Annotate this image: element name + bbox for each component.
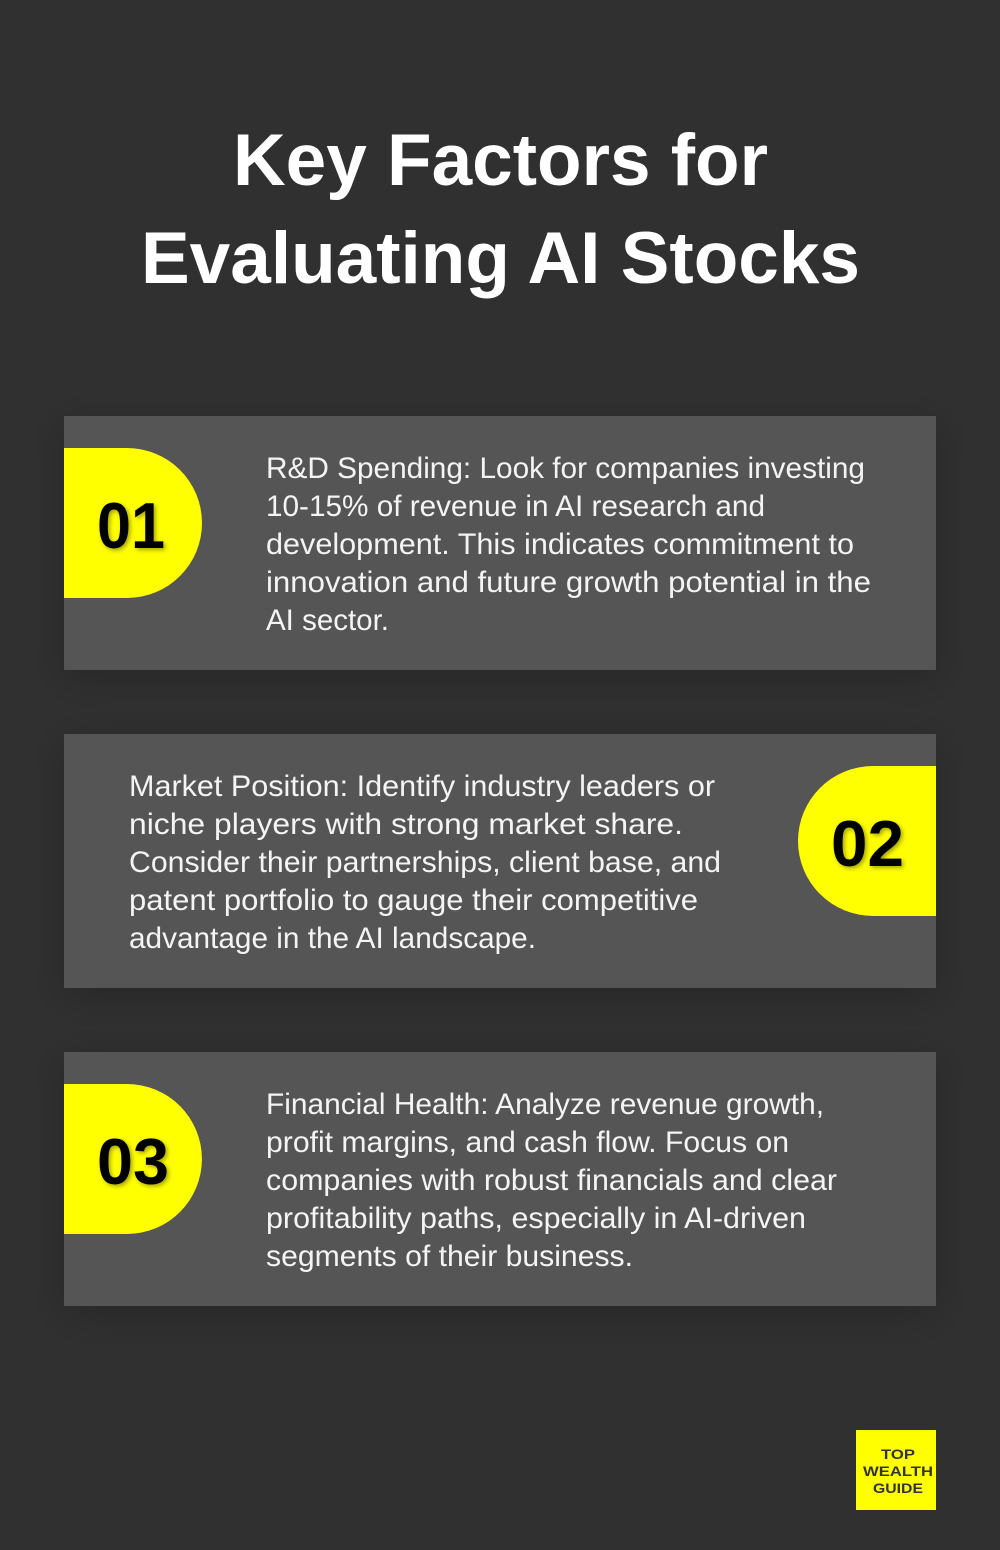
text block: financial health: companies with robust financials and clear	[266, 1164, 837, 1197]
logo: Top Wealth Guide: WEALTH	[863, 1464, 933, 1479]
title: Evaluating AI Stocks	[141, 218, 860, 299]
text block: financial health: segments of their business.	[266, 1240, 633, 1273]
logo: Top Wealth Guide: GUIDE	[873, 1481, 923, 1496]
text block: financial health: profitability paths, especially in AI-driven	[266, 1202, 806, 1235]
number badge 03: 03	[97, 1125, 169, 1198]
panel: R&D spending	[64, 416, 936, 670]
title: Key Factors for	[233, 120, 768, 201]
number badge 01: 01	[97, 489, 165, 562]
text block: R&D spending	[266, 452, 871, 637]
text block: financial health: profit margins, and cash flow. Focus on	[266, 1126, 789, 1159]
number badge 02: 02	[831, 807, 904, 880]
number badge 02	[798, 766, 936, 916]
text block: financial health	[266, 1088, 837, 1273]
text block: market position: patent portfolio to gauge their competitive	[129, 884, 698, 917]
text block: market position: Consider their partnerships, client base, and	[129, 846, 721, 879]
text block: market position: Market Position: Identify industry leaders or	[129, 770, 715, 803]
title	[141, 120, 860, 299]
text block: R&D spending: innovation and future growth potential in the	[266, 566, 871, 599]
number badge 03	[64, 1084, 202, 1234]
logo: Top Wealth Guide	[856, 1430, 936, 1510]
text block: market position	[129, 770, 721, 955]
text block: R&D spending: R&D Spending: Look for companies investing	[266, 452, 865, 485]
text block: financial health: Financial Health: Analyze revenue growth,	[266, 1088, 824, 1121]
text block: R&D spending: AI sector.	[266, 604, 389, 637]
logo: Top Wealth Guide: TOP	[881, 1447, 915, 1462]
text block: R&D spending: development. This indicates commitment to	[266, 528, 854, 561]
text block: R&D spending: 10-15% of revenue in AI research and	[266, 490, 765, 523]
text block: market position: niche players with strong market share.	[129, 808, 683, 841]
panel: financial health	[64, 1052, 936, 1306]
panel: market position	[64, 734, 936, 988]
text block: market position: advantage in the AI landscape.	[129, 922, 536, 955]
number badge 01	[64, 448, 202, 598]
